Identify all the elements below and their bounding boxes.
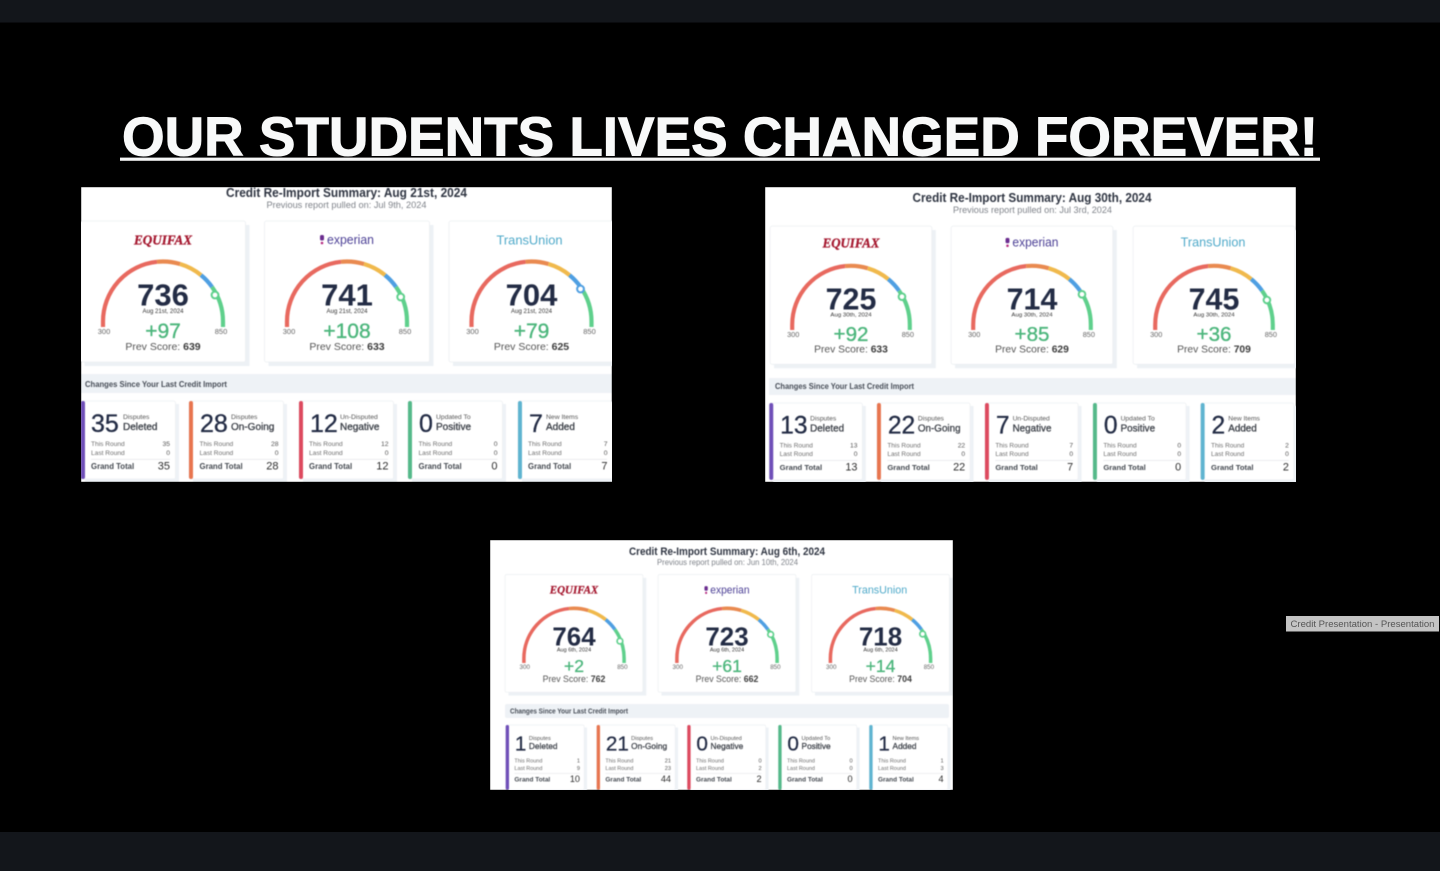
stat label: Updated To [436, 414, 471, 421]
round rows: This Round [1211, 442, 1245, 449]
stat label [231, 414, 274, 433]
score: 718 [859, 623, 902, 651]
round rows: 0 [1069, 451, 1073, 458]
round rows: 2 [1285, 442, 1289, 449]
previous score: Prev Score: 625 [494, 341, 569, 353]
count: 0 [419, 410, 433, 438]
range maximum: 850 [1083, 330, 1095, 339]
previous score: Prev Score: 662 [696, 674, 759, 684]
stat label: Disputes [631, 736, 653, 742]
grand total: 2 [1283, 461, 1289, 473]
score card: Experian 723 [658, 574, 799, 696]
stat label [810, 416, 844, 435]
panel heading: Credit Re-Import Summary: Aug 6th, 2024 [629, 546, 826, 558]
grand total: Grand Total [1211, 463, 1254, 472]
round rows: 0 [494, 450, 498, 457]
grand total: 2 [757, 774, 762, 784]
previous score: Prev Score: 633 [814, 345, 888, 356]
stat label: Updated To [1121, 416, 1155, 423]
score card: Experian 714 [951, 226, 1117, 368]
round rows [514, 758, 580, 774]
grand total [696, 774, 762, 784]
range minimum: 300 [98, 327, 110, 336]
stat label [1228, 416, 1261, 435]
grand total [1211, 461, 1289, 473]
grand total [514, 774, 580, 784]
logo: TransUnion: TransUnion [496, 232, 562, 248]
score date: Aug 21st, 2024 [142, 309, 184, 315]
range maximum: 850 [924, 664, 935, 671]
gauge [677, 608, 777, 663]
score: 741 [321, 278, 373, 312]
grand total: Grand Total [309, 462, 352, 471]
logo: Equifax: EQUIFAX [133, 234, 193, 248]
grand total: 10 [570, 774, 580, 784]
stat label: New Items [893, 736, 919, 742]
panel: credit summary Aug 6th [490, 540, 953, 792]
stat card: new items added [869, 725, 951, 792]
stat label: Disputes [529, 736, 551, 742]
section header: Changes Since Your Last Credit Import [775, 382, 914, 391]
count: 0 [1104, 413, 1118, 440]
stat card: disputes deleted [81, 401, 179, 482]
round rows: This Round [995, 442, 1029, 449]
grand total [878, 774, 944, 784]
grand total: 7 [601, 460, 608, 472]
round rows [787, 758, 853, 774]
stat label: Negative [1013, 424, 1052, 435]
round rows: 0 [854, 451, 858, 458]
grand total: Grand Total [995, 463, 1038, 472]
gauge [287, 262, 407, 327]
score change: +14 [866, 656, 896, 676]
round rows: 9 [577, 766, 580, 772]
logo: Experian: experian [1012, 235, 1058, 250]
stat label: Added [1228, 424, 1257, 435]
gauge [792, 266, 910, 330]
score: 714 [1007, 282, 1057, 316]
round rows: 1 [577, 758, 580, 764]
previous score: Prev Score: 629 [995, 345, 1069, 356]
grand total [418, 460, 498, 472]
round rows: This Round [418, 441, 453, 448]
count: 7 [996, 413, 1010, 440]
round rows: 0 [1177, 442, 1181, 449]
grand total [309, 460, 388, 472]
round rows: Last Round [418, 450, 453, 457]
previous score: Prev Score: 704 [849, 674, 912, 684]
previous score: Prev Score: 762 [543, 674, 606, 684]
score card: Equifax 736 [80, 221, 250, 366]
range minimum: 300 [520, 664, 530, 671]
round rows: Last Round [696, 766, 724, 772]
stat label [711, 736, 744, 751]
range minimum: 300 [673, 664, 683, 671]
stat label: Un-Disputed [1013, 416, 1050, 423]
score date: Aug 6th, 2024 [557, 647, 591, 653]
stat card: new items added [1201, 403, 1297, 483]
panel heading: Credit Re-Import Summary: Aug 30th, 2024 [912, 190, 1152, 205]
grand total: Grand Total [418, 462, 462, 471]
tooltip label [1286, 616, 1439, 632]
grand total [780, 461, 857, 473]
range minimum: 300 [466, 327, 479, 336]
stat label: On-Going [231, 422, 274, 433]
grand total: Grand Total [696, 776, 732, 783]
grand total: 13 [845, 461, 857, 473]
score: 725 [826, 282, 876, 316]
round rows: This Round [200, 441, 234, 448]
score: 736 [137, 278, 189, 312]
score change: +85 [1015, 323, 1049, 346]
round rows: 0 [385, 450, 389, 457]
count: 1 [878, 733, 890, 756]
score card: TransUnion 718 [812, 574, 953, 696]
round rows: 0 [604, 450, 608, 457]
grand total: Grand Total [91, 462, 134, 471]
round rows: Last Round [514, 766, 542, 772]
grand total [787, 774, 853, 784]
grand total: 4 [939, 774, 944, 784]
score change: +61 [712, 656, 742, 676]
score change: +97 [145, 320, 181, 343]
round rows: 0 [1177, 451, 1181, 458]
stat label: New Items [546, 414, 579, 421]
round rows: Last Round [780, 451, 813, 458]
round rows [528, 441, 608, 460]
stat label [546, 414, 579, 433]
score: 704 [506, 278, 558, 312]
score card: Experian 741 [264, 221, 434, 366]
grand total: Grand Total [514, 776, 550, 783]
score date: Aug 30th, 2024 [1011, 312, 1053, 318]
stat card: updated to positive [408, 401, 506, 482]
stat label: Un-Disputed [340, 414, 378, 421]
score: 723 [705, 623, 749, 651]
grand total: 0 [1175, 461, 1181, 473]
panel subheading: Previous report pulled on: Jul 3rd, 2024 [953, 205, 1112, 215]
round rows: Last Round [605, 766, 633, 772]
round rows [605, 758, 671, 774]
stat label [1121, 416, 1156, 435]
count: 2 [1212, 413, 1225, 440]
stat label: Disputes [810, 416, 837, 423]
stat label [918, 416, 961, 435]
score change: +36 [1197, 323, 1231, 346]
round rows: 0 [849, 766, 853, 772]
stat label: Disputes [123, 414, 150, 421]
round rows: Last Round [878, 766, 906, 772]
panel: credit summary Aug 21st [80, 185, 618, 482]
stat label [802, 736, 831, 751]
section header [769, 378, 1296, 395]
round rows: 0 [849, 758, 853, 764]
stat label: On-Going [631, 741, 668, 751]
stat label: New Items [1228, 416, 1261, 423]
grand total [605, 774, 671, 784]
round rows: 21 [665, 758, 671, 764]
stat label: Added [546, 422, 575, 433]
logo: Experian: experian [710, 585, 750, 597]
stat label [436, 414, 471, 433]
previous score: Prev Score: 639 [125, 341, 201, 353]
stat label: Un-Disputed [711, 736, 742, 742]
section header [81, 374, 612, 393]
count: 28 [200, 410, 228, 438]
gauge [524, 608, 624, 663]
score card: TransUnion 745 [1133, 226, 1299, 368]
gauge [830, 608, 931, 663]
count: 21 [606, 733, 629, 756]
score card: TransUnion 704 [449, 221, 618, 366]
grand total: 0 [491, 460, 498, 472]
stat label: Positive [802, 741, 831, 751]
title: OUR STUDENTS LIVES CHANGED FOREVER! [122, 106, 1318, 168]
round rows: This Round [605, 758, 633, 764]
grand total: 28 [266, 460, 278, 472]
round rows: 1 [940, 758, 944, 764]
round rows: 12 [381, 441, 389, 448]
round rows: This Round [887, 442, 921, 449]
panel subheading: Previous report pulled on: Jul 9th, 2024 [266, 200, 426, 210]
score date: Aug 6th, 2024 [863, 647, 898, 653]
panel: credit summary Aug 30th [765, 187, 1299, 483]
gauge [1155, 266, 1273, 330]
round rows [878, 758, 944, 774]
round rows [780, 442, 858, 461]
round rows: Last Round [995, 451, 1029, 458]
count: 12 [310, 410, 338, 438]
round rows: 0 [758, 758, 762, 764]
grand total [200, 460, 278, 472]
range minimum: 300 [283, 327, 295, 336]
panel heading: Credit Re-Import Summary: Aug 21st, 2024 [226, 185, 468, 200]
round rows: 0 [1285, 451, 1289, 458]
round rows: 13 [850, 442, 858, 449]
round rows: 2 [758, 766, 762, 772]
grand total [90, 461, 170, 470]
grand total: 0 [848, 774, 853, 784]
stat card: disputes deleted [769, 403, 866, 483]
round rows: This Round [514, 758, 542, 764]
round rows [1103, 442, 1181, 461]
section header: Changes Since Your Last Credit Import [510, 708, 629, 716]
score: 745 [1189, 282, 1239, 316]
grand total [528, 460, 608, 472]
grand total [1103, 461, 1181, 473]
stat label: Negative [711, 741, 744, 751]
round rows [887, 442, 965, 461]
stat label: Updated To [802, 736, 830, 742]
stat label: Negative [340, 422, 380, 433]
grand total: Grand Total [887, 463, 930, 472]
stat label [1013, 416, 1052, 435]
range minimum: 300 [1150, 330, 1162, 339]
score change: +79 [514, 320, 549, 343]
score change: +108 [323, 320, 371, 343]
round rows: This Round [787, 758, 815, 764]
count: 22 [888, 413, 915, 440]
score date: Aug 21st, 2024 [326, 309, 368, 315]
count: 7 [529, 410, 543, 438]
range maximum: 850 [770, 664, 781, 671]
round rows: 23 [665, 766, 671, 772]
grand total: Grand Total [780, 463, 822, 472]
stat label: Positive [1121, 424, 1156, 435]
logo: Experian: experian [327, 232, 374, 247]
stat card: disputes deleted [506, 725, 587, 792]
round rows [995, 442, 1073, 461]
range maximum: 850 [617, 664, 628, 671]
gauge [103, 262, 223, 327]
round rows: 0 [166, 450, 170, 457]
gauge [472, 262, 592, 327]
round rows: This Round [780, 442, 813, 449]
round rows: Last Round [1211, 451, 1245, 458]
stat label [340, 414, 380, 433]
grand total: Grand Total [200, 462, 243, 471]
panel subheading: Previous report pulled on: Jun 10th, 2024 [657, 558, 799, 567]
previous score: Prev Score: 633 [309, 341, 385, 353]
stat label [893, 736, 919, 751]
count: 0 [787, 733, 799, 756]
grand total [887, 461, 965, 473]
score: 764 [552, 623, 596, 651]
round rows: 28 [271, 441, 279, 448]
stat card: new items added [518, 401, 616, 482]
stat label [123, 414, 157, 433]
range maximum: 850 [399, 327, 411, 336]
round rows: Last Round [200, 450, 234, 457]
round rows: Last Round [787, 766, 815, 772]
range maximum: 850 [583, 327, 596, 336]
stat label [529, 736, 558, 751]
range maximum: 850 [1265, 330, 1277, 339]
round rows: 0 [961, 451, 965, 458]
range maximum: 850 [215, 327, 227, 336]
score date: Aug 30th, 2024 [1193, 312, 1235, 318]
tooltip label: Credit Presentation - Presentation [1290, 619, 1434, 629]
count: 0 [696, 733, 708, 756]
stat card: disputes on-going [597, 725, 678, 792]
range maximum: 850 [902, 330, 914, 339]
round rows [91, 441, 170, 460]
logo: Equifax: EQUIFAX [549, 584, 599, 597]
round rows [200, 441, 279, 460]
top bar [0, 0, 1440, 22]
stat label: Deleted [810, 424, 844, 435]
score change: +92 [834, 323, 868, 346]
round rows: 7 [1069, 442, 1073, 449]
round rows: 7 [604, 441, 608, 448]
stat card: updated to positive [1093, 403, 1190, 483]
logo: TransUnion: TransUnion [852, 585, 907, 597]
score date: Aug 30th, 2024 [830, 312, 872, 318]
round rows: This Round [1103, 442, 1137, 449]
range minimum: 300 [787, 330, 799, 339]
stat label: Added [893, 741, 917, 751]
round rows: Last Round [309, 450, 343, 457]
logo: TransUnion: TransUnion [1181, 235, 1245, 250]
score card: Equifax 764 [505, 574, 646, 696]
round rows: Last Round [528, 450, 562, 457]
grand total: 12 [376, 460, 388, 472]
score change: +2 [564, 656, 584, 676]
grand total [995, 461, 1073, 473]
stat label: Disputes [231, 414, 258, 421]
stat label: Positive [436, 422, 471, 433]
section header: Changes Since Your Last Credit Import [85, 380, 227, 389]
grand total: Grand Total [528, 462, 571, 471]
stat label: Deleted [529, 741, 558, 751]
round rows: This Round [528, 441, 562, 448]
round rows: This Round [696, 758, 724, 764]
grand total: Grand Total [605, 776, 641, 783]
grand total: 35 [158, 460, 170, 472]
stat label: Deleted [123, 422, 157, 433]
stat card: undisputed negative [687, 725, 769, 792]
round rows [696, 758, 762, 774]
round rows: 0 [494, 441, 498, 448]
round rows [309, 441, 389, 460]
logo: Equifax: EQUIFAX [822, 236, 880, 251]
grand total: 7 [1067, 461, 1073, 473]
count: 13 [780, 413, 808, 440]
grand total: Grand Total [878, 776, 914, 783]
bottom bar [0, 832, 1440, 871]
stat card: disputes on-going [189, 401, 287, 482]
gauge [973, 266, 1091, 330]
stat card: disputes on-going [877, 403, 974, 483]
round rows: This Round [878, 758, 906, 764]
stat label: On-Going [918, 424, 961, 435]
stat card: undisputed negative [985, 403, 1082, 483]
stat card: updated to positive [778, 725, 860, 792]
round rows: This Round [309, 441, 343, 448]
grand total: Grand Total [1103, 463, 1146, 472]
stat card: undisputed negative [299, 401, 397, 482]
range minimum: 300 [826, 664, 837, 671]
round rows [1211, 442, 1289, 461]
round rows: 3 [940, 766, 944, 772]
grand total: Grand Total [787, 776, 823, 783]
round rows: Last Round [887, 451, 921, 458]
round rows [418, 441, 498, 460]
stat label [631, 736, 668, 751]
round rows: 35 [162, 441, 170, 448]
stat label: Disputes [918, 416, 945, 423]
previous score: Prev Score: 709 [1177, 345, 1251, 356]
score date: Aug 6th, 2024 [710, 647, 744, 653]
round rows: Last Round [91, 450, 125, 457]
range minimum: 300 [968, 330, 980, 339]
round rows: 22 [958, 442, 965, 449]
round rows: Last Round [1103, 451, 1137, 458]
score card: Equifax 725 [770, 226, 936, 368]
section header [505, 704, 949, 718]
count: 1 [515, 733, 526, 756]
round rows: 0 [275, 450, 279, 457]
grand total: 44 [661, 774, 671, 784]
round rows: This Round [91, 441, 125, 448]
count: 35 [91, 410, 119, 438]
grand total: 22 [953, 461, 965, 473]
score date: Aug 21st, 2024 [511, 309, 553, 315]
